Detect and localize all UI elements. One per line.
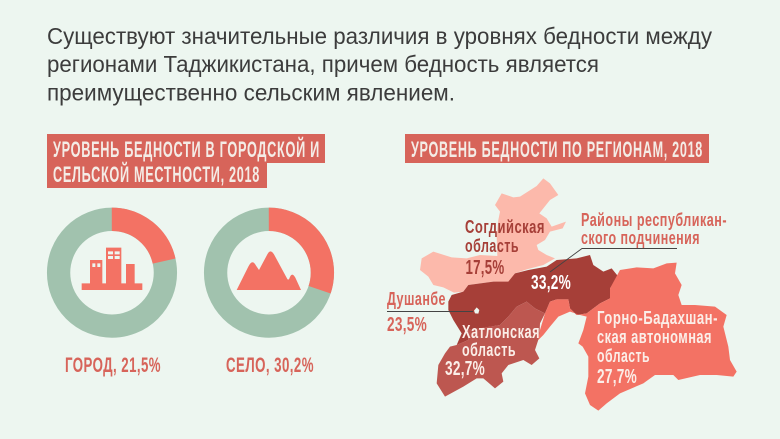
label: Khatlon bbox=[445, 321, 540, 380]
heading: urban and rural poverty: УРОВЕНЬ БЕДНОСТИ В ГОРОДСКОЙ И bbox=[53, 137, 320, 162]
region: Gorno-Badakhshan bbox=[538, 263, 737, 411]
label: Sughd: 17,5% bbox=[466, 256, 504, 279]
value: republican districts: 33,2% bbox=[531, 271, 571, 294]
label: Sughd bbox=[465, 216, 545, 279]
region: Sughd bbox=[420, 178, 566, 293]
label: city: ГОРОД, 21,5% bbox=[65, 354, 161, 377]
title bbox=[47, 23, 712, 106]
label: Gorno-Badakhshan bbox=[597, 307, 718, 388]
label: republican districts bbox=[581, 209, 727, 248]
leader line: republican districts bbox=[550, 248, 677, 272]
label: republican districts: ского подчинения bbox=[581, 227, 700, 248]
label: village: СЕЛО, 30,2% bbox=[226, 354, 314, 377]
title: Существуют значительные различия в уровнях бедности между bbox=[47, 23, 712, 49]
label: Gorno-Badakhshan: 27,7% bbox=[597, 365, 637, 388]
icon: city buildings bbox=[82, 248, 142, 290]
label: Sughd: область bbox=[465, 235, 519, 256]
region: Districts of republican subordination bbox=[448, 255, 618, 345]
label: Khatlon: 32,7% bbox=[445, 357, 485, 380]
label: Gorno-Badakhshan: Горно-Бадахшан- bbox=[597, 307, 718, 328]
region: Khatlon bbox=[437, 302, 545, 397]
heading: urban and rural poverty: СЕЛЬСКОЙ МЕСТНОСТИ, 2018 bbox=[53, 162, 260, 187]
icon: mountains bbox=[237, 251, 301, 290]
title: регионами Таджикистана, причем бедность является bbox=[47, 51, 599, 77]
heading: urban and rural poverty bbox=[47, 134, 325, 188]
leader line: Dushanbe bbox=[387, 310, 473, 312]
icon: Dushanbe marker bbox=[474, 307, 479, 314]
label: Dushanbe bbox=[387, 288, 446, 336]
map of Tajikistan bbox=[420, 178, 737, 411]
label: Sughd: Согдийская bbox=[465, 216, 545, 237]
donut chart: city 21.5% bbox=[59, 219, 165, 326]
label: Dushanbe: 23,5% bbox=[387, 313, 427, 336]
title: преимущественно сельским явлением. bbox=[47, 80, 455, 106]
label: Dushanbe: Душанбе bbox=[387, 288, 446, 309]
label: Gorno-Badakhshan: ская автономная bbox=[597, 326, 712, 347]
donut chart: village 30.2% bbox=[216, 219, 322, 326]
label: Gorno-Badakhshan: область bbox=[597, 345, 650, 366]
label: Khatlon: область bbox=[462, 339, 516, 360]
label: Khatlon: Хатлонская bbox=[462, 321, 540, 342]
